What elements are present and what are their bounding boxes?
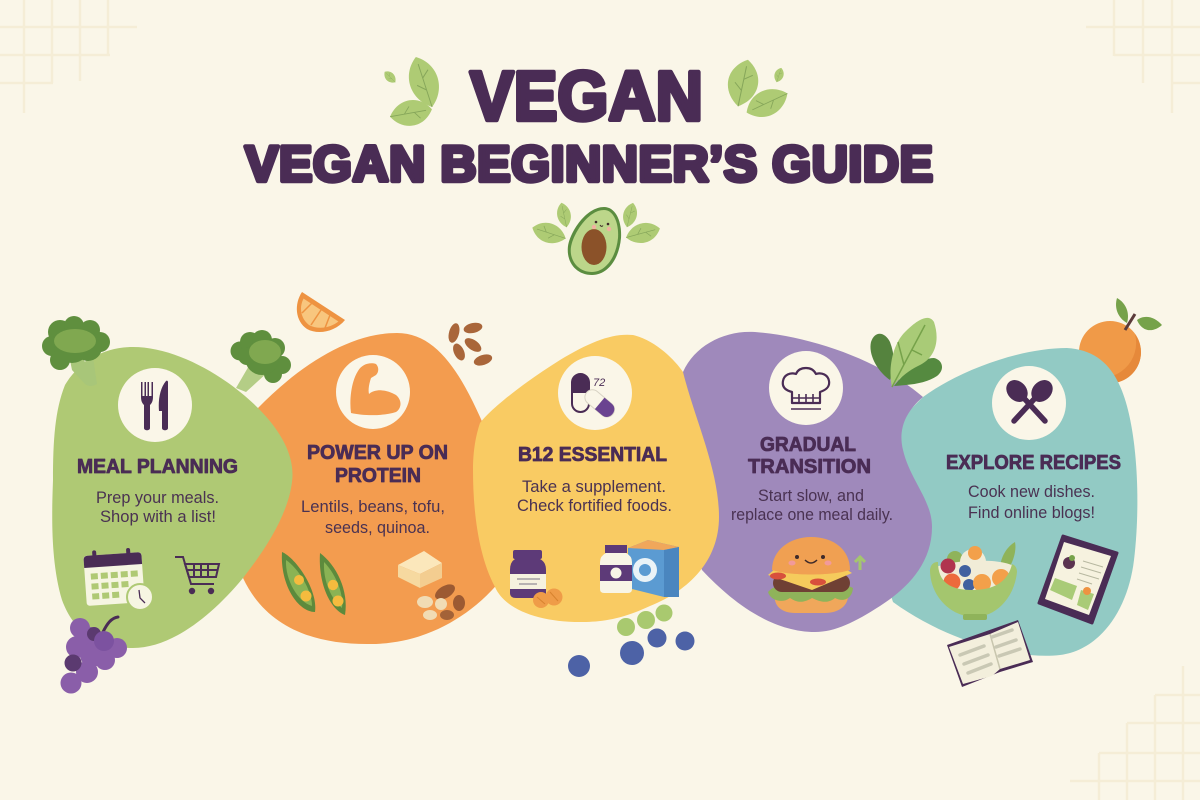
- icon: right title leaves: [723, 57, 793, 124]
- panel: meal planning: [42, 292, 494, 694]
- body text: [731, 487, 893, 524]
- teal blob: [860, 348, 1137, 656]
- icon: recipe tablet: [1039, 536, 1117, 623]
- body text: Shop with a list!: [100, 508, 216, 526]
- panel: b12 essential: [473, 335, 719, 677]
- orange blob: [243, 333, 505, 644]
- icon: broccoli right: [230, 330, 291, 392]
- green blob: [52, 347, 293, 648]
- heading: EXPLORE RECIPES: [946, 452, 1121, 474]
- heading: TRANSITION: [748, 456, 871, 478]
- icon: spinach leaves: [870, 318, 942, 387]
- subtitle: Vegan Beginner's Guide: VEGAN BEGINNER’S GUIDE: [245, 136, 933, 192]
- heading: B12 ESSENTIAL: [518, 444, 667, 466]
- icon: open book: [947, 620, 1033, 687]
- icon: b12 capsule circle: [558, 356, 632, 430]
- body text: Cook new dishes.: [968, 483, 1095, 501]
- icon: blueberries: [568, 628, 694, 677]
- icon: fork and knife circle: [118, 368, 192, 442]
- icon: broccoli left: [42, 316, 110, 386]
- body text: Find online blogs!: [968, 504, 1095, 522]
- icon: avocado with leaves: [529, 201, 662, 275]
- panel: explore recipes: [860, 348, 1137, 687]
- body text: Check fortified foods.: [517, 497, 672, 515]
- icon: b12 capsule circle: 72: [593, 377, 605, 389]
- title: VEGAN: VEGAN: [470, 57, 703, 135]
- body text: [517, 478, 672, 515]
- icon: green peas: [617, 604, 672, 636]
- body text: Prep your meals.: [96, 489, 219, 507]
- body text: [301, 498, 445, 537]
- yellow blob: [473, 335, 719, 622]
- body text: Start slow, and: [758, 487, 864, 505]
- body text: replace one meal daily.: [731, 506, 893, 524]
- icon: grapes: [60, 617, 127, 694]
- icon: almonds: [447, 321, 494, 368]
- icon: whole orange: [1079, 298, 1162, 383]
- icon: smiling burger: [768, 537, 865, 613]
- icon: supplement jar and tablets: [510, 550, 562, 608]
- icon: mixed nuts: [417, 581, 465, 620]
- icon: crossed spoons circle: [992, 366, 1066, 440]
- body text: [968, 483, 1095, 522]
- body text: Lentils, beans, tofu,: [301, 498, 445, 516]
- title block: [245, 57, 933, 192]
- heading: [307, 442, 448, 487]
- heading: GRADUAL: [760, 434, 856, 456]
- icon: left title leaves: [382, 53, 446, 129]
- body text: Take a supplement.: [522, 478, 666, 496]
- heading: MEAL PLANNING: [77, 456, 238, 478]
- icon: salad bowl: [930, 542, 1017, 620]
- icon: chef hat circle: [769, 351, 843, 425]
- panel: power up on protein: [243, 333, 505, 644]
- icon: pea pods: [282, 552, 346, 615]
- purple blob: [660, 332, 932, 632]
- icon: calendar with clock: [83, 547, 153, 610]
- icon: muscle circle: [336, 355, 410, 429]
- body text: seeds, quinoa.: [325, 519, 430, 537]
- icon: bottle and cereal box: [600, 540, 679, 597]
- icon: tofu cube: [398, 551, 442, 588]
- heading: [748, 434, 871, 478]
- heading: POWER UP ON: [307, 442, 448, 464]
- icon: orange slice: [297, 292, 345, 332]
- heading: PROTEIN: [335, 465, 421, 487]
- body text: [96, 489, 219, 526]
- panel: gradual transition: [660, 318, 942, 632]
- icon: shopping cart: [175, 557, 219, 593]
